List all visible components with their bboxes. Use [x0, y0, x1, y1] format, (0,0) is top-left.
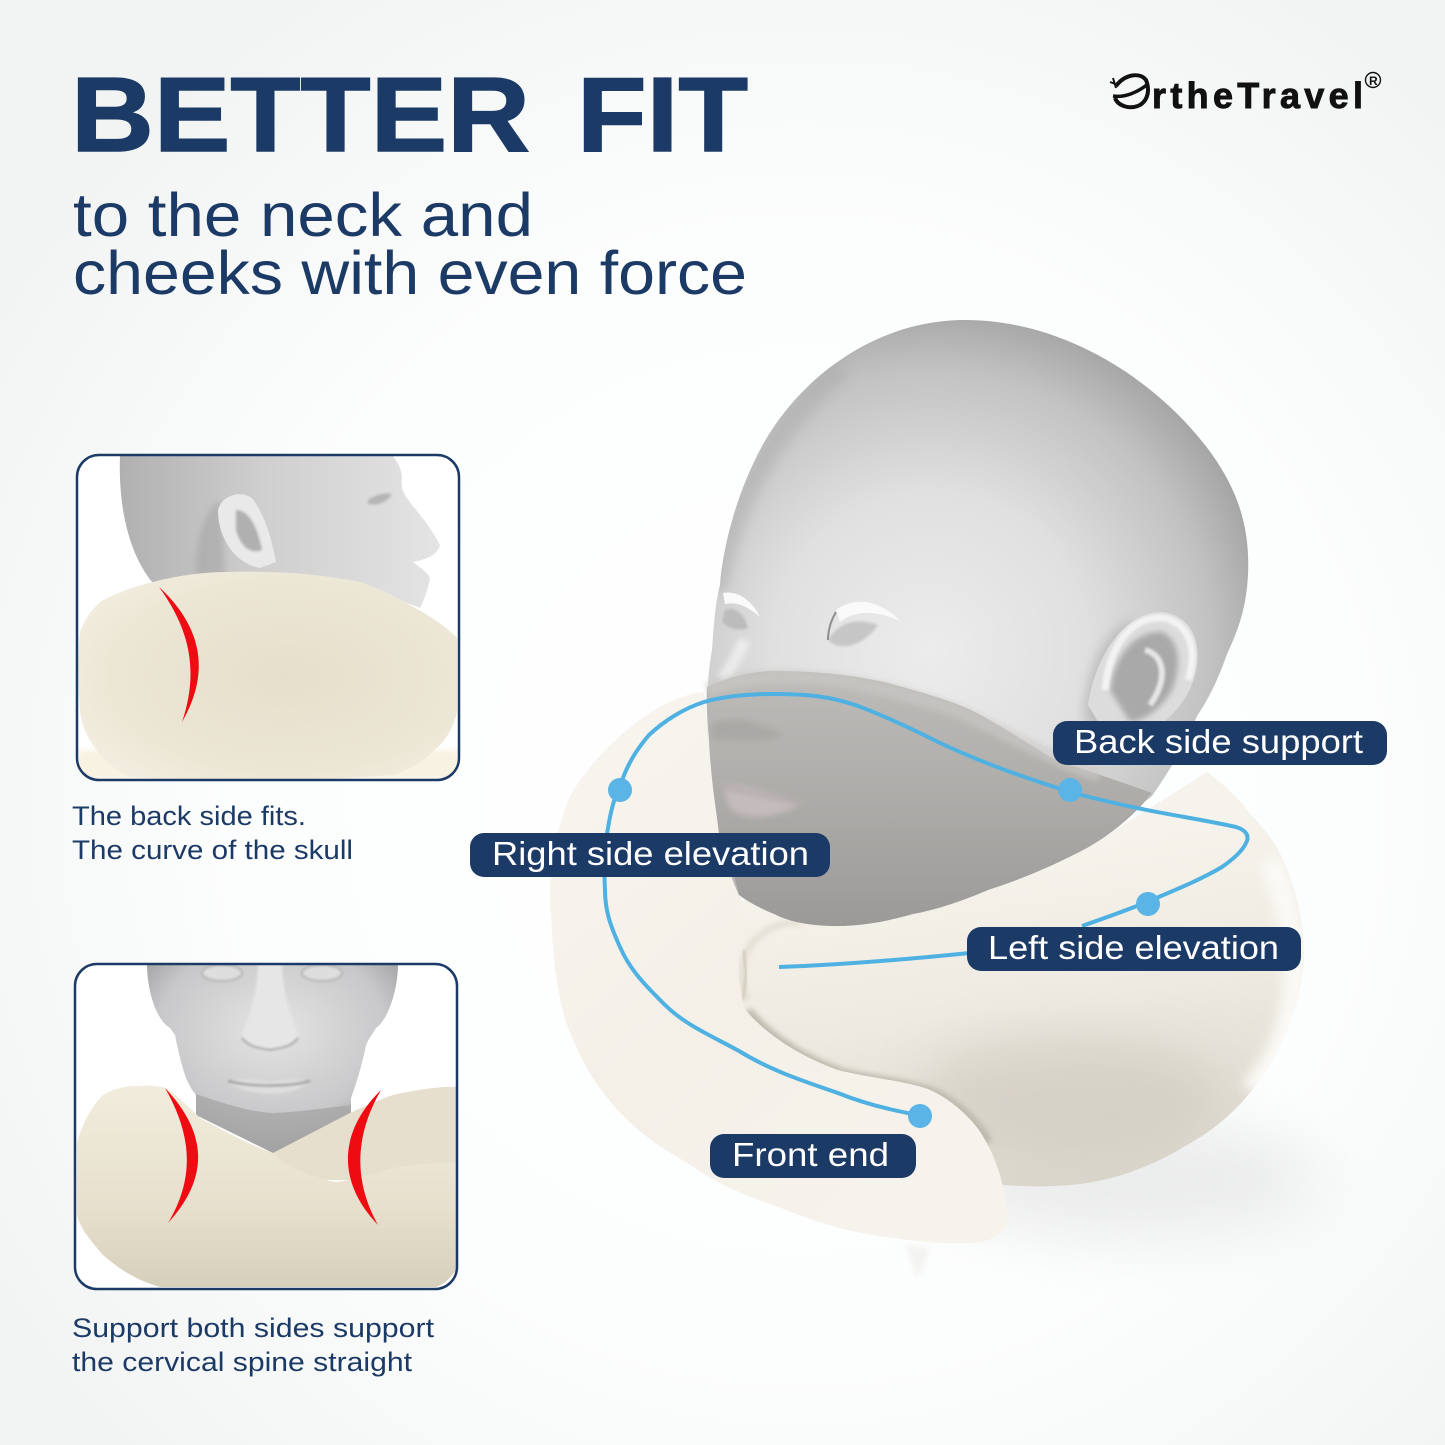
main illustration: neck pillow — [550, 692, 1304, 1280]
blue contour line — [604, 694, 1248, 1115]
title: FIT — [577, 56, 748, 174]
ear shadow — [1085, 620, 1135, 740]
label: left side elevation — [967, 927, 1301, 971]
label: front end: Front end — [732, 1136, 889, 1173]
icon: eyes — [202, 965, 342, 981]
pillow body shading — [742, 860, 1295, 1155]
mouth — [228, 1079, 310, 1094]
pillow front — [77, 1086, 458, 1287]
panel: both sides support — [75, 964, 458, 1289]
neck shadow behind ear — [195, 500, 225, 575]
pillow tag under tip — [905, 1245, 930, 1280]
nose highlight — [722, 640, 745, 680]
backing shadow — [77, 750, 459, 780]
label: left side elevation: Left side elevation — [988, 929, 1279, 966]
title: BETTER — [71, 56, 530, 174]
icon: left eye — [722, 592, 760, 630]
caption: both sides: the cervical spine straight — [72, 1347, 413, 1377]
icon: ear — [1088, 612, 1198, 735]
head side view — [120, 455, 440, 608]
icon: right eye — [828, 602, 900, 646]
nose — [242, 964, 298, 1052]
caption: both sides: Support both sides support — [72, 1313, 435, 1343]
subtitle: to the neck and — [73, 181, 533, 249]
mask top edge band — [707, 677, 1100, 775]
nose under mask — [710, 719, 785, 741]
pillow left arm — [550, 692, 1008, 1243]
subtitle — [73, 181, 747, 307]
pillow — [78, 572, 457, 781]
red curve — [159, 587, 199, 722]
caption: both sides — [72, 1313, 435, 1377]
temple shading — [716, 368, 840, 590]
main illustration: head — [707, 320, 1248, 926]
registered mark — [1366, 72, 1380, 88]
caption: back side: The back side fits. — [72, 801, 306, 831]
arm crease — [743, 950, 746, 1000]
label: right side elevation: Right side elevation — [492, 835, 809, 872]
lips — [722, 785, 803, 817]
icon: logo globe with plane — [1110, 75, 1148, 107]
label: right side elevation — [470, 833, 830, 877]
label: front end — [710, 1134, 916, 1178]
subtitle: cheeks with even force — [73, 239, 747, 307]
chin mask tint — [196, 1094, 351, 1153]
logo: rtheTravel — [1152, 75, 1363, 116]
translucent pillow section over face — [707, 671, 1152, 926]
caption: back side: The curve of the skull — [72, 835, 353, 865]
main illustration: pillow shadow — [940, 1120, 1320, 1240]
head front view — [147, 964, 398, 1153]
label: back side support — [1053, 721, 1387, 765]
label: back side support: Back side support — [1074, 723, 1363, 760]
pillow body — [700, 772, 1304, 1186]
caption: back side — [72, 801, 353, 865]
title — [71, 56, 748, 174]
icon: ear — [218, 494, 276, 568]
eye — [368, 493, 392, 505]
pillow back arm — [273, 1087, 458, 1180]
contour dots — [608, 778, 1160, 1128]
registered mark: R — [1369, 74, 1378, 88]
panel: back side fit — [77, 455, 459, 781]
red curves — [165, 1088, 381, 1225]
